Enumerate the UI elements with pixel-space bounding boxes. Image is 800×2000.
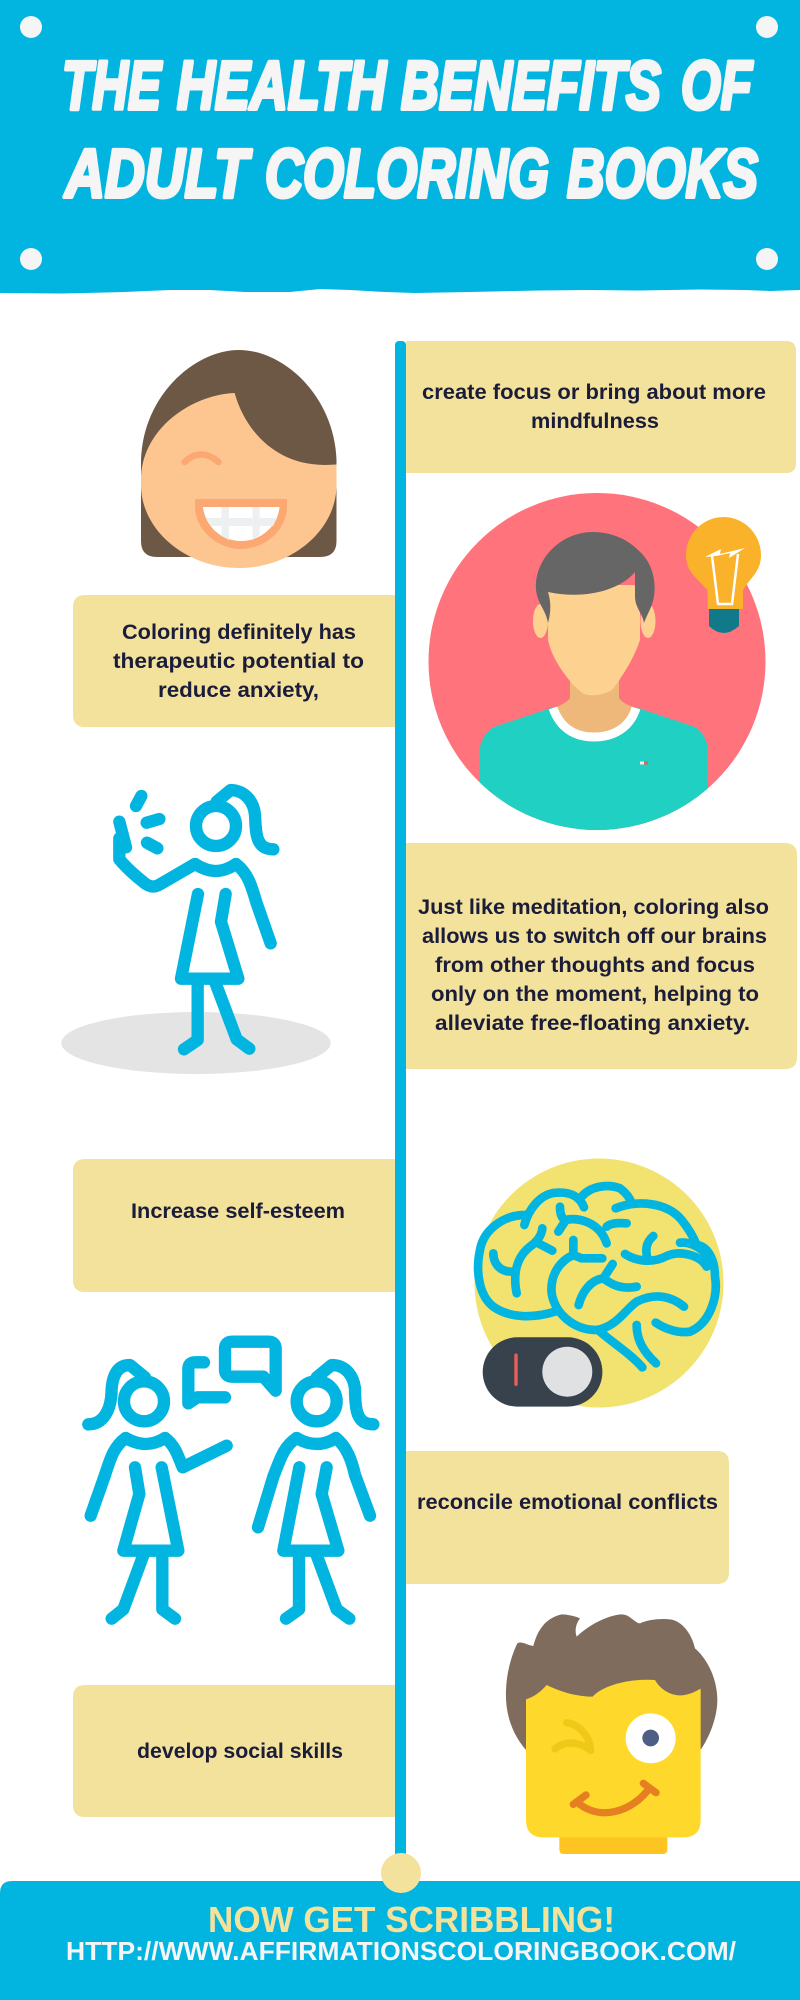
icon: man with light bulb xyxy=(428,493,766,840)
panel: self-esteem: Increase self-esteem xyxy=(131,1199,345,1223)
icon: woman on phone xyxy=(61,790,331,1074)
panel: emotional conflicts xyxy=(406,1451,729,1584)
header banner xyxy=(0,0,800,294)
panel: meditation: allows us to switch off our brains xyxy=(422,924,767,948)
title: ADULT xyxy=(63,135,252,212)
panel: self-esteem xyxy=(73,1159,395,1292)
panel: meditation: only on the moment, helping to xyxy=(431,982,759,1006)
title: COLORING xyxy=(265,135,549,212)
panel: meditation xyxy=(406,843,797,1069)
panel: social skills xyxy=(73,1685,395,1817)
timeline end dot xyxy=(381,1853,421,1893)
panel: meditation: Just like meditation, coloring also xyxy=(418,895,769,919)
panel: create focus: mindfulness xyxy=(531,409,659,433)
footer heading: NOW GET SCRIBBLING! xyxy=(208,1899,615,1940)
title: OF xyxy=(681,47,753,124)
icon: bulb xyxy=(686,517,761,633)
panel: emotional conflicts: reconcile emotional conflicts xyxy=(417,1490,718,1514)
panel: meditation: alleviate free-floating anxiety. xyxy=(435,1011,750,1035)
title: THE xyxy=(62,47,162,124)
banner corner dots xyxy=(20,16,778,270)
title xyxy=(62,47,758,212)
timeline line xyxy=(381,341,421,1893)
icon: toggle switch xyxy=(483,1337,602,1407)
footer url: HTTP://WWW.AFFIRMATIONSCOLORINGBOOK.COM/ xyxy=(66,1936,736,1966)
title: HEALTH xyxy=(177,47,388,124)
icon: brain with switch xyxy=(474,1158,724,1408)
panel: reduce anxiety: Coloring definitely has xyxy=(122,620,356,644)
icon: two women talking xyxy=(88,1342,373,1619)
icon: winking boy xyxy=(506,1614,717,1854)
title: BENEFITS xyxy=(401,47,661,124)
footer band xyxy=(0,1881,800,2000)
panel: reduce anxiety: reduce anxiety, xyxy=(158,678,319,702)
panel: meditation: from other thoughts and focus xyxy=(435,953,755,977)
panel: reduce anxiety xyxy=(73,595,395,727)
panel: create focus xyxy=(406,341,796,473)
icon: smiling woman xyxy=(141,350,336,568)
panel: create focus: create focus or bring about more xyxy=(422,380,766,404)
panel: reduce anxiety: therapeutic potential to xyxy=(113,649,364,673)
panel: social skills: develop social skills xyxy=(137,1739,343,1763)
